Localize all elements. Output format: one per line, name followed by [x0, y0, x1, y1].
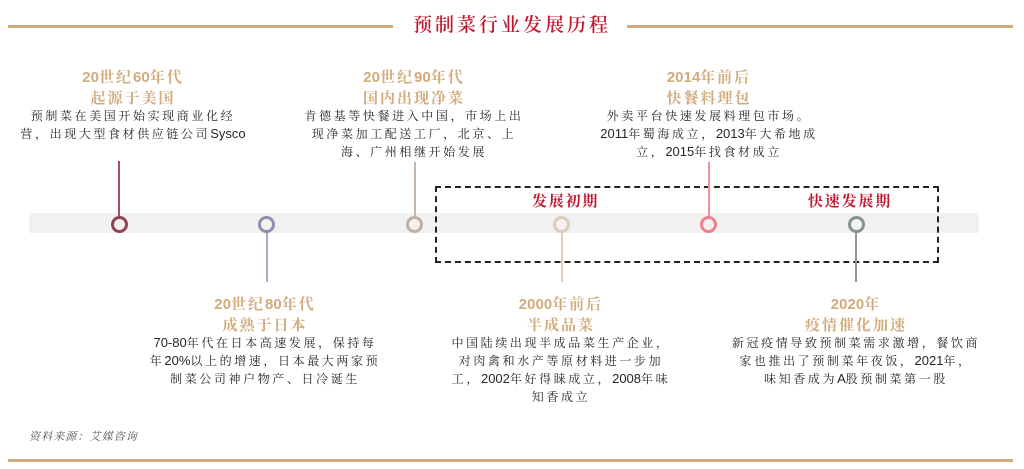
title: 预制菜行业发展历程	[413, 15, 611, 36]
heading: 1980s: 成熟于日本	[222, 316, 308, 334]
footer rule	[8, 459, 1013, 462]
description: 1980s	[150, 335, 380, 386]
description: 2000: 工，2002年好得睐成立，2008年味	[452, 371, 670, 386]
heading: 1960s	[82, 68, 184, 106]
description: 1980s: 制菜公司神户物产、日冷诞生	[170, 372, 360, 386]
heading: 1980s	[214, 296, 316, 334]
stem: 2020	[855, 230, 857, 282]
stage label: rapid development: 快速发展期	[808, 193, 892, 210]
description: 2000: 知香成立	[532, 390, 590, 404]
description: 1990s: 肯德基等快餐进入中国，市场上出	[304, 109, 524, 123]
text block: 1990s	[304, 68, 524, 159]
heading: 2020: 2020年	[831, 296, 881, 312]
stem: 2014	[708, 162, 710, 217]
node: 1980s	[258, 216, 275, 232]
timeline band	[29, 213, 979, 233]
text block: 1980s	[150, 296, 380, 386]
stage label: early development: 发展初期	[532, 193, 599, 210]
stem: 1980s	[266, 230, 268, 282]
node: 2014	[700, 216, 717, 232]
description: 2014	[600, 109, 818, 159]
heading: 2020	[805, 296, 907, 334]
description: 1960s	[20, 109, 246, 141]
description: 1960s: 预制菜在美国开始实现商业化经	[31, 109, 235, 123]
description: 2000: 中国陆续出现半成品菜生产企业，	[451, 336, 670, 350]
source note: 资料来源：艾媒咨询	[29, 431, 138, 443]
heading: 1990s	[363, 68, 465, 106]
heading: 2014: 2014年前后	[667, 68, 751, 86]
stem: 1990s	[414, 162, 416, 217]
description: 2014: 外卖平台快速发展料理包市场。	[607, 109, 811, 123]
heading: 1990s: 20世纪90年代	[363, 68, 465, 86]
description: 1990s: 海、广州相继开始发展	[341, 145, 487, 159]
heading: 2000: 2000年前后	[519, 296, 603, 312]
heading: 2014	[666, 68, 752, 106]
description: 2014: 2011年蜀海成立，2013年大希地成	[600, 126, 818, 141]
description: 2020: 家也推出了预制菜年夜饭，2021年，	[739, 353, 973, 368]
description: 1960s: 营，出现大型食材供应链公司Sysco	[20, 126, 246, 141]
heading: 2014: 快餐料理包	[666, 90, 752, 106]
description: 2000	[451, 336, 670, 404]
text block: 2014	[600, 68, 818, 159]
title rule right	[627, 25, 1013, 28]
heading: 1960s: 起源于美国	[90, 90, 176, 106]
stem: 2000	[560, 230, 562, 282]
description: 1980s: 70-80年代在日本高速发展，保持每	[153, 335, 377, 350]
text block: 2020	[732, 296, 980, 386]
description: 2000: 对肉禽和水产等原材料进一步加	[459, 354, 663, 368]
heading: 2000: 半成品菜	[527, 316, 595, 334]
description: 1990s	[304, 109, 524, 159]
description: 2020	[732, 336, 980, 386]
description: 2020: 味知香成为A股预制菜第一股	[764, 371, 948, 386]
heading: 2000	[519, 296, 603, 334]
title rule left	[8, 25, 393, 28]
dashed box: development stages	[435, 186, 939, 263]
description: 1990s: 现净菜加工配送工厂，北京、上	[312, 127, 516, 141]
node: 1990s	[406, 216, 422, 232]
heading: 1980s: 20世纪80年代	[214, 296, 316, 312]
description: 2014: 立，2015年找食材成立	[636, 144, 782, 159]
heading: 2020: 疫情催化加速	[805, 316, 907, 334]
heading: 1960s: 20世纪60年代	[82, 68, 184, 86]
text block: 1960s	[20, 68, 246, 141]
text block: 2000	[451, 296, 670, 404]
node: 1960s	[111, 216, 128, 232]
stem: 1960s	[118, 161, 120, 217]
node: 2000	[553, 216, 570, 232]
node: 2020	[848, 216, 864, 232]
description: 2020: 新冠疫情导致预制菜需求激增，餐饮商	[732, 336, 980, 350]
description: 1980s: 年20%以上的增速，日本最大两家预	[150, 353, 380, 368]
heading: 1990s: 国内出现净菜	[363, 90, 465, 106]
